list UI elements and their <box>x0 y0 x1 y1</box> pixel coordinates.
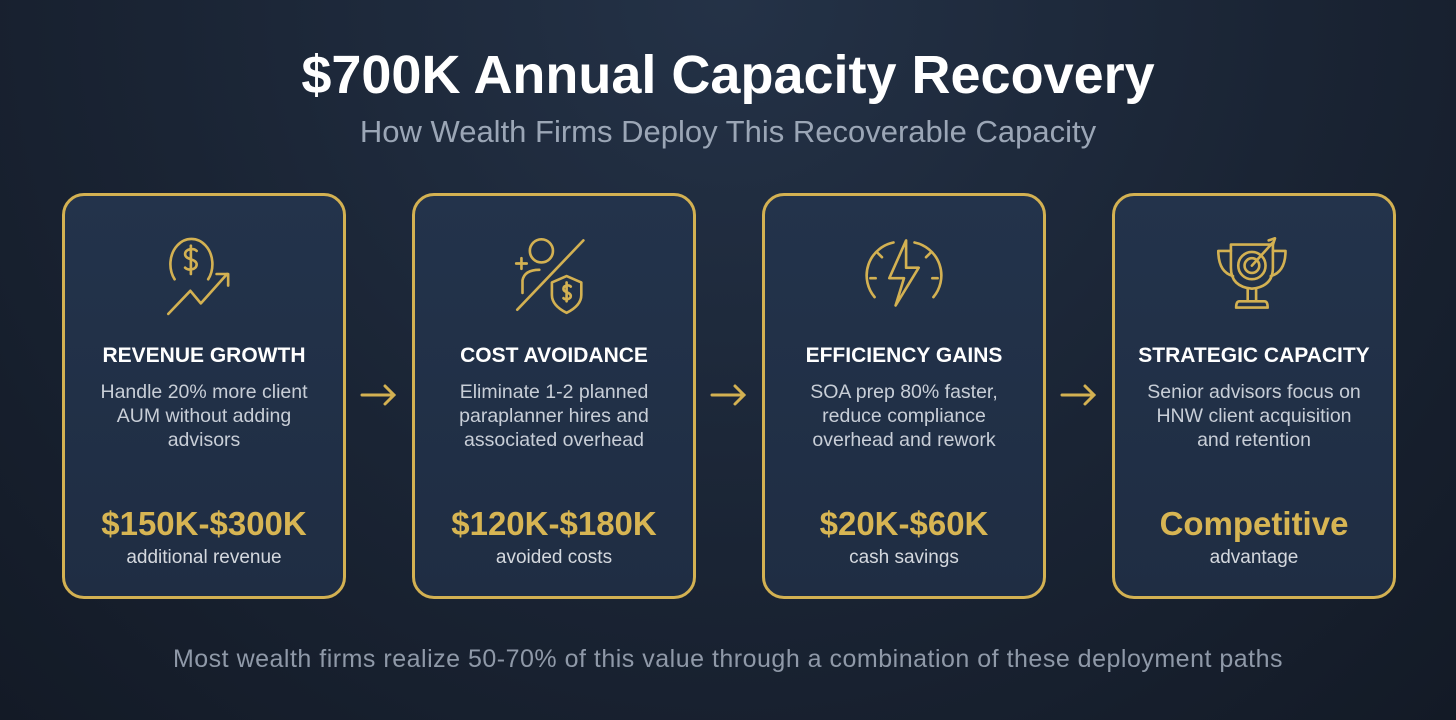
value caption: advantage <box>1210 547 1298 568</box>
icon: dollar growth <box>166 238 230 316</box>
heading: STRATEGIC CAPACITY <box>1138 344 1370 367</box>
heading: COST AVOIDANCE <box>460 344 648 367</box>
footer note: Most wealth firms realize 50-70% of this value through a combination of these deployment paths <box>173 645 1283 673</box>
panel: cost avoidance <box>412 193 696 599</box>
body text: Handle 20% more client AUM without adding advisors <box>100 381 308 451</box>
value: $20K-$60K <box>820 505 988 542</box>
value: Competitive <box>1160 505 1348 542</box>
value caption: additional revenue <box>126 547 282 568</box>
value caption: cash savings <box>849 547 959 568</box>
panel: revenue growth <box>62 193 346 599</box>
heading: EFFICIENCY GAINS <box>806 344 1002 367</box>
heading: REVENUE GROWTH <box>102 344 306 367</box>
icon: lightning gauge <box>865 239 943 307</box>
panel: strategic capacity <box>1112 193 1396 599</box>
title: $700K Annual Capacity Recovery <box>301 45 1155 105</box>
icon: trophy target <box>1217 237 1287 309</box>
arrow 3 <box>1060 384 1096 406</box>
arrow 1 <box>360 384 396 406</box>
subtitle: How Wealth Firms Deploy This Recoverable Capacity <box>360 114 1096 149</box>
arrow 2 <box>710 384 746 406</box>
panel: efficiency gains <box>762 193 1046 599</box>
icon: person percent shield <box>514 238 585 314</box>
body text: Senior advisors focus on HNW client acquisition and retention <box>1147 381 1361 451</box>
body text: SOA prep 80% faster, reduce compliance overhead and rework <box>810 381 998 451</box>
value: $150K-$300K <box>101 505 307 542</box>
value: $120K-$180K <box>451 505 657 542</box>
body text: Eliminate 1-2 planned paraplanner hires and associated overhead <box>459 381 649 451</box>
value caption: avoided costs <box>496 547 612 568</box>
